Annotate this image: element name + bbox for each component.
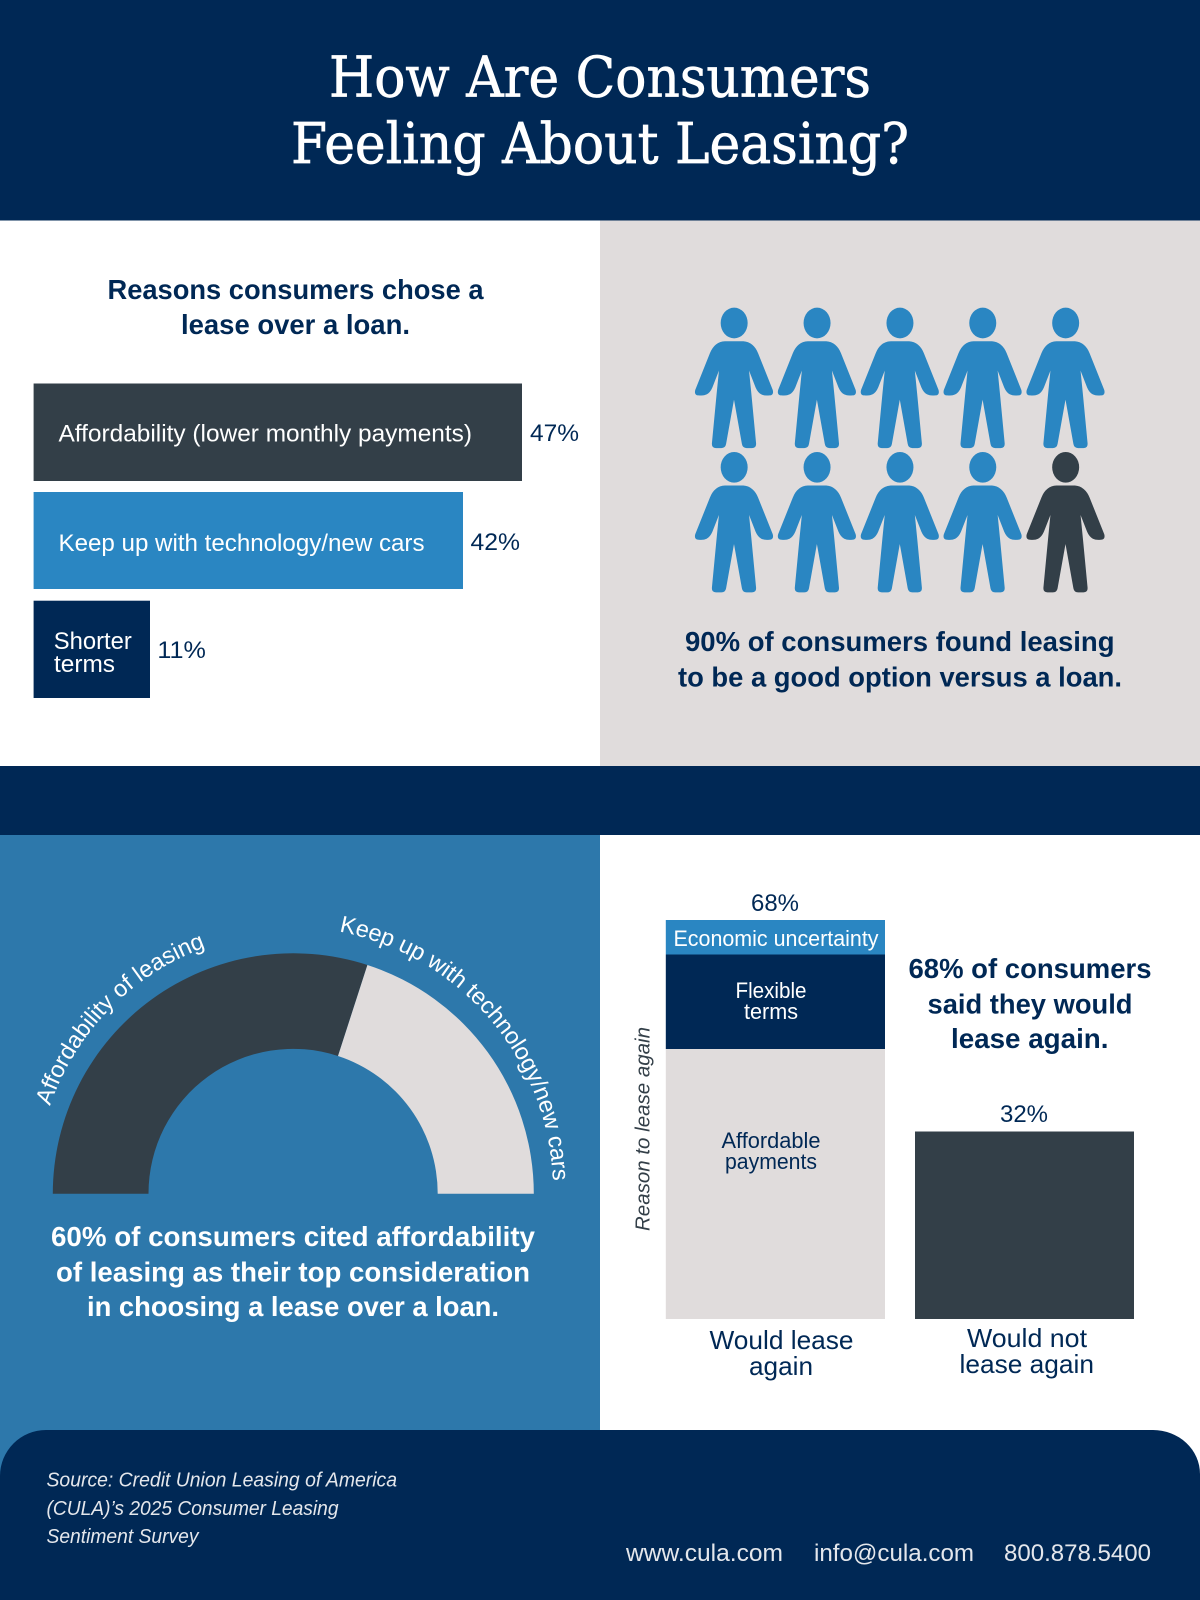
panel: reasons consumers chose a lease: [0, 220, 600, 766]
heading: reasons: [108, 274, 484, 340]
category label: would not lease again: [960, 1323, 1094, 1379]
text: 68 percent statement: said they would: [928, 988, 1132, 1020]
navy divider band: [0, 766, 1200, 835]
stacked bar: would lease again: Economic uncertainty: [674, 926, 878, 951]
axis label: Reason to lease again: [632, 1027, 654, 1231]
icon: person 5: [1027, 308, 1104, 448]
contact details: [625, 1540, 1151, 1567]
icon: person 3: [861, 308, 938, 448]
icon: person 10 dark: [1027, 452, 1104, 592]
stacked bar: would lease again: [666, 890, 885, 1319]
bar: affordability 47%: [34, 384, 579, 481]
stacked bar: would lease again: payments: [725, 1149, 817, 1174]
icon: person 6: [695, 452, 773, 592]
icon: people pictogram: [695, 308, 1104, 592]
text: 68 percent statement: 68% of consumers: [908, 953, 1152, 984]
bar: technology 42%: [34, 492, 520, 589]
source note: Sentiment Survey: [46, 1526, 199, 1548]
stacked bar: would lease again: Affordable: [722, 1128, 820, 1153]
contact details: www.cula.com: [625, 1540, 783, 1567]
icon: person 9: [944, 452, 1021, 592]
stacked bar: would lease again: terms: [744, 999, 798, 1024]
heading: reasons: Reasons consumers chose a: [108, 274, 484, 305]
header banner: [0, 0, 1200, 220]
text: 68 percent statement: lease again.: [951, 1023, 1108, 1054]
bar: technology 42%: 42%: [470, 529, 520, 556]
text: 60 percent statement: in choosing a lease over a loan.: [87, 1291, 499, 1322]
title: Feeling About Leasing?: [291, 112, 909, 177]
gauge segment: affordability 60%: [53, 953, 367, 1194]
text: 90 percent statement: [678, 626, 1122, 692]
text: 68 percent statement: [908, 953, 1152, 1054]
contact details: info@cula.com: [814, 1540, 974, 1567]
panel: would lease again chart: [600, 835, 1200, 1435]
bar: shorter terms 11%: [34, 601, 206, 698]
bar: technology 42%: Keep up with technology/new cars: [58, 530, 424, 557]
text: 90 percent statement: 90% of consumers found leasing: [685, 626, 1114, 657]
stacked bar: would lease again: 68%: [751, 890, 799, 917]
category label: would lease again: again: [749, 1351, 813, 1381]
category label: would lease again: Would lease: [710, 1325, 854, 1355]
bar: would not lease again: [915, 1101, 1134, 1319]
footer: [0, 1430, 1200, 1600]
text: 60 percent statement: [51, 1221, 535, 1322]
text: 90 percent statement: to be a good option versus a loan.: [678, 662, 1122, 692]
bar: would not lease again: 32%: [1000, 1101, 1048, 1128]
category label: would not lease again: lease again: [960, 1349, 1094, 1379]
icon: person 8: [861, 452, 938, 592]
heading: reasons: lease over a loan.: [181, 309, 410, 340]
title: How Are Consumers: [329, 46, 871, 110]
arc label: affordability: Affordability of leasing: [37, 936, 204, 1106]
chart: half-donut gauge: [37, 916, 566, 1194]
category label: would lease again: [710, 1325, 854, 1381]
contact details: 800.878.5400: [1004, 1540, 1151, 1567]
bar: shorter terms 11%: terms: [54, 651, 115, 678]
arc label: technology: Keep up with technology/new cars: [340, 916, 566, 1180]
bar: shorter terms 11%: 11%: [157, 637, 206, 664]
icon: person 1: [695, 308, 773, 448]
icon: person 7: [778, 452, 856, 592]
gauge segment: technology 40%: [338, 965, 534, 1194]
icon: person 4: [944, 308, 1021, 448]
text: 60 percent statement: of leasing as their top consideration: [56, 1256, 530, 1288]
text: 60 percent statement: 60% of consumers cited affordability: [51, 1221, 535, 1252]
panel: gauge affordability: [0, 835, 600, 1476]
stacked bar: would lease again: Flexible: [736, 978, 806, 1003]
source note: [46, 1470, 397, 1548]
source note: (CULA)’s 2025 Consumer Leasing: [46, 1498, 338, 1520]
bar: shorter terms 11%: Shorter: [54, 628, 132, 655]
bar: affordability 47%: Affordability (lower monthly payments): [58, 420, 472, 448]
title: [291, 46, 909, 177]
bar: affordability 47%: 47%: [530, 420, 579, 447]
category label: would not lease again: Would not: [967, 1323, 1088, 1353]
icon: person 2: [778, 308, 856, 448]
source note: Source: Credit Union Leasing of America: [46, 1470, 397, 1492]
panel: 90 percent pictogram: [600, 220, 1200, 766]
